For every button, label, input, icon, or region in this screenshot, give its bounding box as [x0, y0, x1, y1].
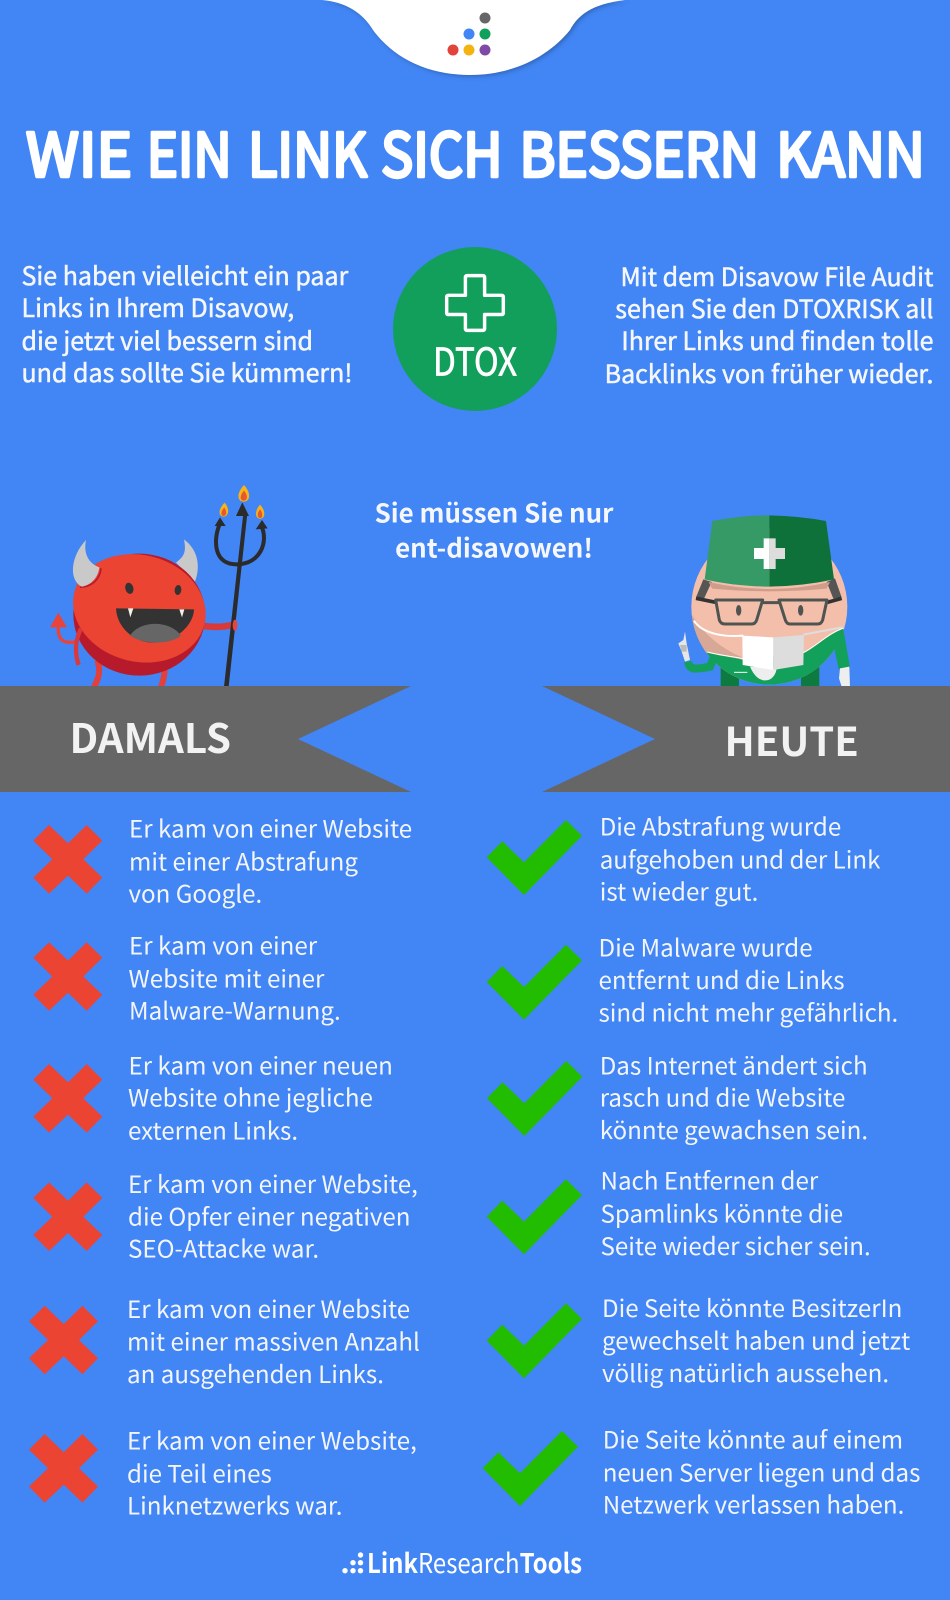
row 2 left: Website mit einer [128, 960, 325, 994]
center callout: ent-disavowen! [395, 528, 593, 566]
banner: damals [0, 686, 411, 792]
row 1 right: aufgehoben und der Link [600, 840, 881, 876]
row 1 left [33, 810, 412, 910]
row 5 right: Die Seite könnte BesitzerIn [602, 1289, 902, 1324]
row 3 right: Das Internet ändert sich [600, 1046, 868, 1082]
row 4 right: Seite wieder sicher sein. [600, 1227, 871, 1262]
row 4 left: SEO-Attacke war. [128, 1230, 319, 1265]
intro text left: Sie haben vielleicht ein paar [22, 257, 349, 293]
center callout: Sie müssen Sie nur [375, 494, 614, 530]
banner: heute: HEUTE [724, 710, 859, 768]
row 6 right: Netzwerk verlassen haben. [603, 1486, 904, 1521]
row 3 right [487, 1046, 868, 1146]
intro text left: Links in Ihrem Disavow, [22, 289, 294, 325]
row 1 left: Er kam von einer Website [129, 810, 412, 844]
title: WIE [26, 108, 132, 194]
row 4 right: Spamlinks könnte die [600, 1194, 843, 1230]
title: BESSERN [520, 108, 759, 194]
row 6 right [483, 1421, 920, 1521]
intro text right: Backlinks von früher wieder. [605, 355, 934, 391]
intro text left: und das sollte Sie kümmern! [22, 354, 352, 390]
intro text right [605, 258, 934, 391]
top logo tab [322, 0, 627, 76]
banner: heute [542, 686, 950, 792]
intro text right: Ihrer Links und finden tolle [621, 322, 934, 358]
row 6 left: die Teil eines [127, 1454, 272, 1490]
row 2 left: Er kam von einer [129, 926, 318, 962]
title [26, 108, 925, 194]
row 1 right: ist wieder gut. [600, 872, 758, 908]
row 2 left: Malware-Warnung. [129, 992, 341, 1026]
row 3 left: Website ohne jegliche [128, 1078, 373, 1114]
row 4 left: die Opfer einer negativen [128, 1198, 410, 1232]
row 5 left: Er kam von einer Website [127, 1290, 410, 1325]
intro text left: die jetzt viel bessern sind [22, 322, 313, 358]
title: EIN [147, 108, 232, 194]
row 1 left: mit einer Abstrafung [129, 842, 358, 878]
row 4 left [33, 1165, 418, 1265]
row 6 left: Er kam von einer Website, [127, 1422, 417, 1457]
row 1 right [487, 808, 881, 908]
row 5 left [29, 1290, 420, 1390]
row 2 right: entfernt und die Links [598, 961, 844, 996]
row 6 right: neuen Server liegen und das [603, 1454, 920, 1488]
row 4 left: Er kam von einer Website, [128, 1165, 418, 1200]
DTOX badge: DTOX [433, 332, 517, 386]
row 4 right [487, 1162, 871, 1262]
center callout [375, 494, 614, 566]
row 6 right: Die Seite könnte auf einem [603, 1421, 903, 1456]
row 5 left: mit einer massiven Anzahl [127, 1322, 420, 1358]
title: SICH [381, 108, 502, 194]
DTOX badge [393, 247, 557, 411]
icon: devil with trident [50, 485, 268, 687]
row 5 right [487, 1289, 910, 1389]
title: LINK [248, 108, 367, 194]
row 2 right [487, 928, 898, 1028]
intro text left [22, 257, 352, 390]
row 3 left: Er kam von einer neuen [128, 1046, 393, 1082]
banner: damals: DAMALS [70, 706, 231, 765]
row 2 right: Die Malware wurde [598, 928, 813, 964]
row 4 right: Nach Entfernen der [600, 1162, 819, 1197]
row 2 right: sind nicht mehr gefährlich. [598, 994, 898, 1028]
row 6 left: Linknetzwerks war. [127, 1487, 342, 1522]
row 1 left: von Google. [128, 874, 262, 910]
title: KANN [776, 108, 925, 194]
row 2 left [33, 926, 341, 1026]
row 6 left [29, 1422, 417, 1522]
row 3 right: rasch und die Website [600, 1078, 845, 1114]
intro text right: Mit dem Disavow File Audit [620, 258, 934, 294]
intro text right: sehen Sie den DTOXRISK all [615, 290, 934, 326]
row 3 left [33, 1046, 393, 1146]
row 5 left: an ausgehenden Links. [127, 1355, 384, 1390]
row 1 right: Die Abstrafung wurde [600, 808, 841, 842]
footer logo: LinkResearchTools: LinkResearchTools [367, 1542, 582, 1581]
row 3 left: externen Links. [128, 1112, 298, 1146]
row 3 right: könnte gewachsen sein. [600, 1111, 868, 1146]
row 5 right: gewechselt haben und jetzt [602, 1322, 910, 1356]
icon: doctor with mask [678, 515, 857, 690]
row 5 right: völlig natürlich aussehen. [602, 1354, 889, 1389]
